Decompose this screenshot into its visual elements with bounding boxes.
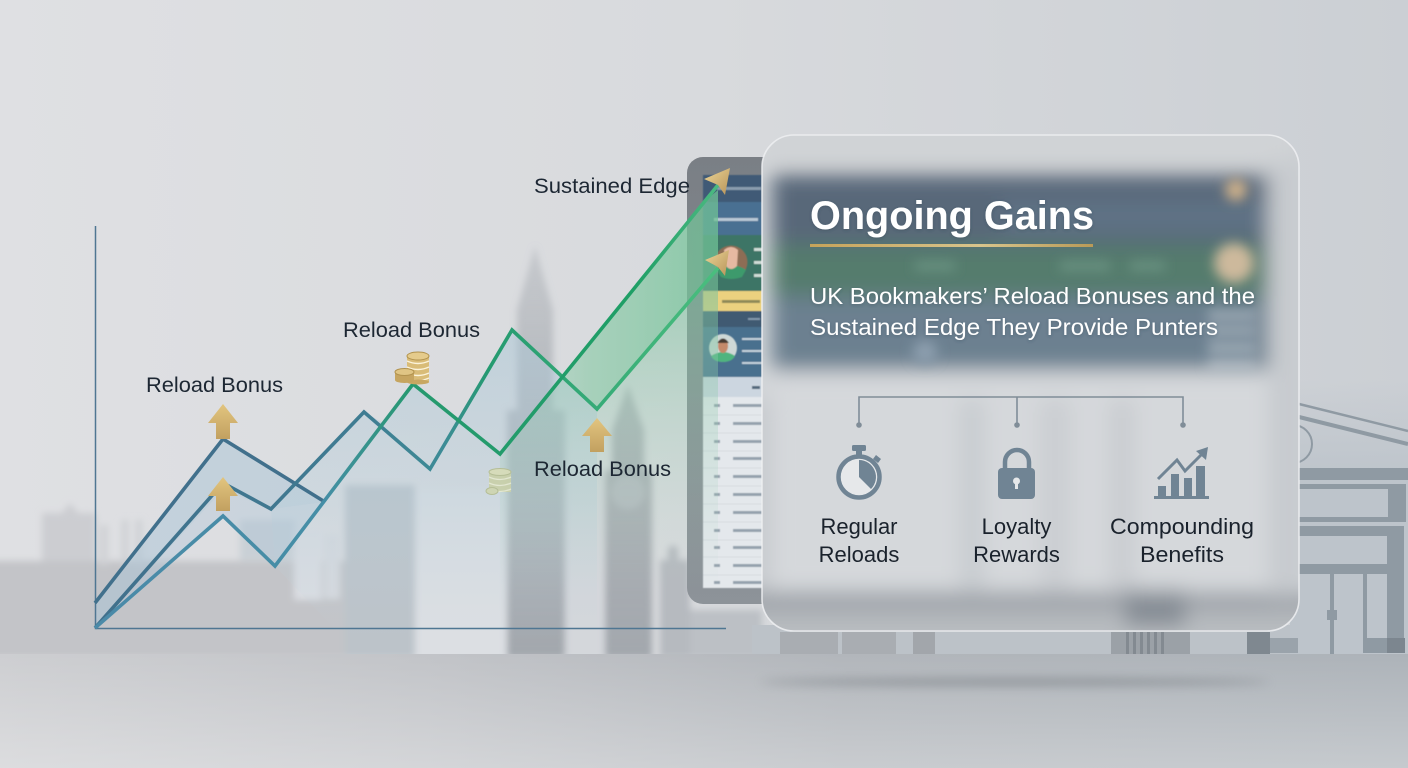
icon: gold arrowhead sustained edge: [704, 168, 730, 195]
line: upper sustained edge path: [95, 185, 718, 628]
chart label: sustained edge: Sustained Edge: [534, 175, 690, 198]
icon: growth chart: [1154, 447, 1209, 499]
label: loyalty rewards: Loyalty: [982, 514, 1051, 539]
avatar: woman: [714, 246, 748, 279]
label: regular reloads: Reloads: [819, 542, 899, 567]
label: regular reloads: [819, 514, 899, 567]
title gold underline: [810, 244, 1093, 247]
label: regular reloads: Regular: [820, 514, 898, 539]
label: compounding benefits: Compounding: [1110, 514, 1254, 539]
avatar: man: [709, 334, 737, 362]
floor: [0, 654, 1408, 768]
label: compounding benefits: Benefits: [1140, 542, 1224, 567]
background: lower block buildings: [752, 625, 1302, 654]
panel blurred backdrop: [762, 156, 1299, 630]
label: compounding benefits: [1110, 514, 1254, 567]
label: loyalty rewards: [973, 514, 1060, 567]
chart area fills: [95, 190, 718, 640]
panel subtitle: Sustained Edge They Provide Punters: [810, 314, 1218, 340]
panel subtitle: [810, 283, 1255, 340]
connector bracket: [856, 397, 1186, 428]
background: bookmaker shopfront: [1270, 380, 1408, 654]
panel: ongoing gains glass card: [761, 134, 1300, 632]
icon: gold arrow centre: [582, 418, 612, 452]
line: early reload path: [95, 439, 325, 603]
chart label: reload bonus middle: Reload Bonus: [343, 319, 480, 342]
background: blurred London skyline: [0, 246, 762, 658]
icon: gold arrow lower left: [208, 477, 238, 511]
icon: faded coin stack: [486, 468, 511, 494]
line: middle growth path: [95, 268, 718, 628]
icon: gold coin stack: [395, 352, 429, 384]
chart label: reload bonus right: Reload Bonus: [534, 458, 671, 481]
chart label: reload bonus left: Reload Bonus: [146, 374, 283, 397]
icon: stopwatch: [838, 445, 881, 498]
label: loyalty rewards: Rewards: [973, 542, 1060, 567]
panel subtitle: UK Bookmakers’ Reload Bonuses and the: [810, 283, 1255, 309]
chart axes: [96, 226, 726, 628]
icon: gold arrow top left: [208, 404, 238, 439]
panel edge highlight: [762, 135, 1299, 631]
line chart: [95, 185, 726, 640]
icon: gold arrowhead second line: [705, 250, 729, 276]
floor shadow under panel: [760, 678, 1270, 686]
icon: padlock: [998, 450, 1035, 499]
panel title: Ongoing Gains: [810, 194, 1094, 238]
tablet: [687, 157, 764, 604]
